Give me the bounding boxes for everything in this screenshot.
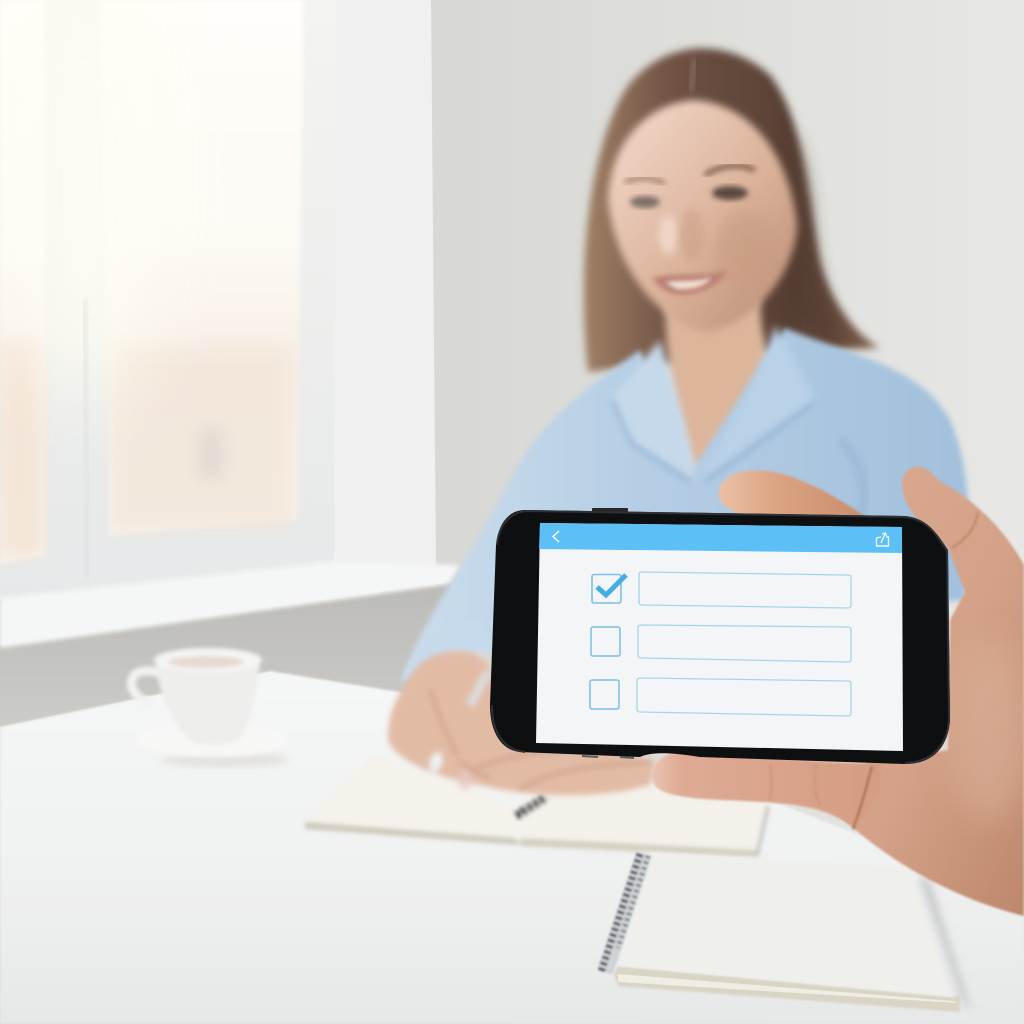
- phone bezel highlight: [492, 511, 949, 763]
- cup handle: [131, 671, 160, 704]
- hair dark side: [780, 130, 850, 345]
- frame shadow: [330, 0, 334, 566]
- left eyebrow: [625, 178, 665, 184]
- knuckle lines: [770, 764, 820, 806]
- cover page: [618, 852, 953, 997]
- window sill: [0, 561, 460, 648]
- phone body: [490, 510, 950, 764]
- nails: [457, 770, 473, 790]
- coffee: [168, 656, 244, 668]
- neck: [665, 295, 780, 470]
- palm highlight: [950, 640, 1024, 820]
- window reveal: [328, 0, 436, 566]
- row 1 checkbox with check: [592, 574, 626, 603]
- left window pane: [0, 0, 45, 564]
- palm and upper thumb: [820, 467, 1024, 916]
- ring: [428, 751, 444, 773]
- table: [0, 671, 1024, 1024]
- notebook back: [305, 755, 768, 857]
- row 1 field: [639, 572, 851, 608]
- share icon: [876, 533, 888, 546]
- main window pane: [100, 0, 303, 535]
- shirt: [402, 328, 968, 682]
- app header: [539, 523, 902, 553]
- bottom buttons: [582, 756, 634, 758]
- row 2 field: [638, 625, 851, 662]
- thumb crease: [853, 766, 872, 829]
- row 3 field: [637, 678, 851, 716]
- notebook front: [601, 852, 960, 1012]
- row 3 checkbox: [590, 680, 619, 709]
- woman: [402, 48, 968, 684]
- window glow: [15, 0, 155, 400]
- shirt collar left: [612, 340, 695, 480]
- page edges: [614, 966, 960, 1012]
- notebook spiral: [601, 854, 648, 972]
- hair part highlight: [690, 58, 695, 92]
- thumb: [652, 752, 880, 830]
- nose: [659, 215, 677, 255]
- back arrow: [553, 531, 559, 542]
- top button: [592, 508, 628, 512]
- window frame: [0, 0, 336, 600]
- shirt fold shadow: [840, 440, 864, 515]
- screen: [536, 523, 903, 751]
- wall below sill: [0, 582, 452, 727]
- mullion shadow: [84, 300, 88, 580]
- right eye: [712, 186, 748, 200]
- phone: [490, 508, 950, 764]
- teeth: [665, 277, 712, 289]
- cheek shading: [715, 210, 775, 290]
- holding hand: [652, 467, 1024, 916]
- sleeve cuff: [402, 618, 500, 684]
- hair back: [584, 48, 880, 372]
- index finger: [719, 470, 865, 516]
- face: [608, 100, 797, 332]
- cup rim: [154, 648, 262, 672]
- saucer: [136, 723, 288, 757]
- binding clip: [516, 797, 546, 816]
- collar shadow: [612, 400, 815, 482]
- finger lines: [430, 690, 650, 790]
- finger crease: [952, 512, 978, 548]
- cup body: [155, 660, 260, 745]
- mouth: [652, 270, 728, 294]
- right eyebrow: [705, 166, 755, 175]
- coffee cup: [131, 648, 288, 757]
- row 2 checkbox: [591, 627, 620, 656]
- woman's hands: [388, 651, 655, 795]
- left eye: [630, 196, 660, 208]
- nose shadow: [680, 209, 704, 261]
- distant building: [0, 340, 292, 555]
- shirt collar right: [700, 325, 815, 480]
- cup shadow: [160, 753, 290, 767]
- window: [0, 0, 436, 600]
- bracelet: [470, 672, 488, 705]
- notebook shadow: [918, 876, 972, 1012]
